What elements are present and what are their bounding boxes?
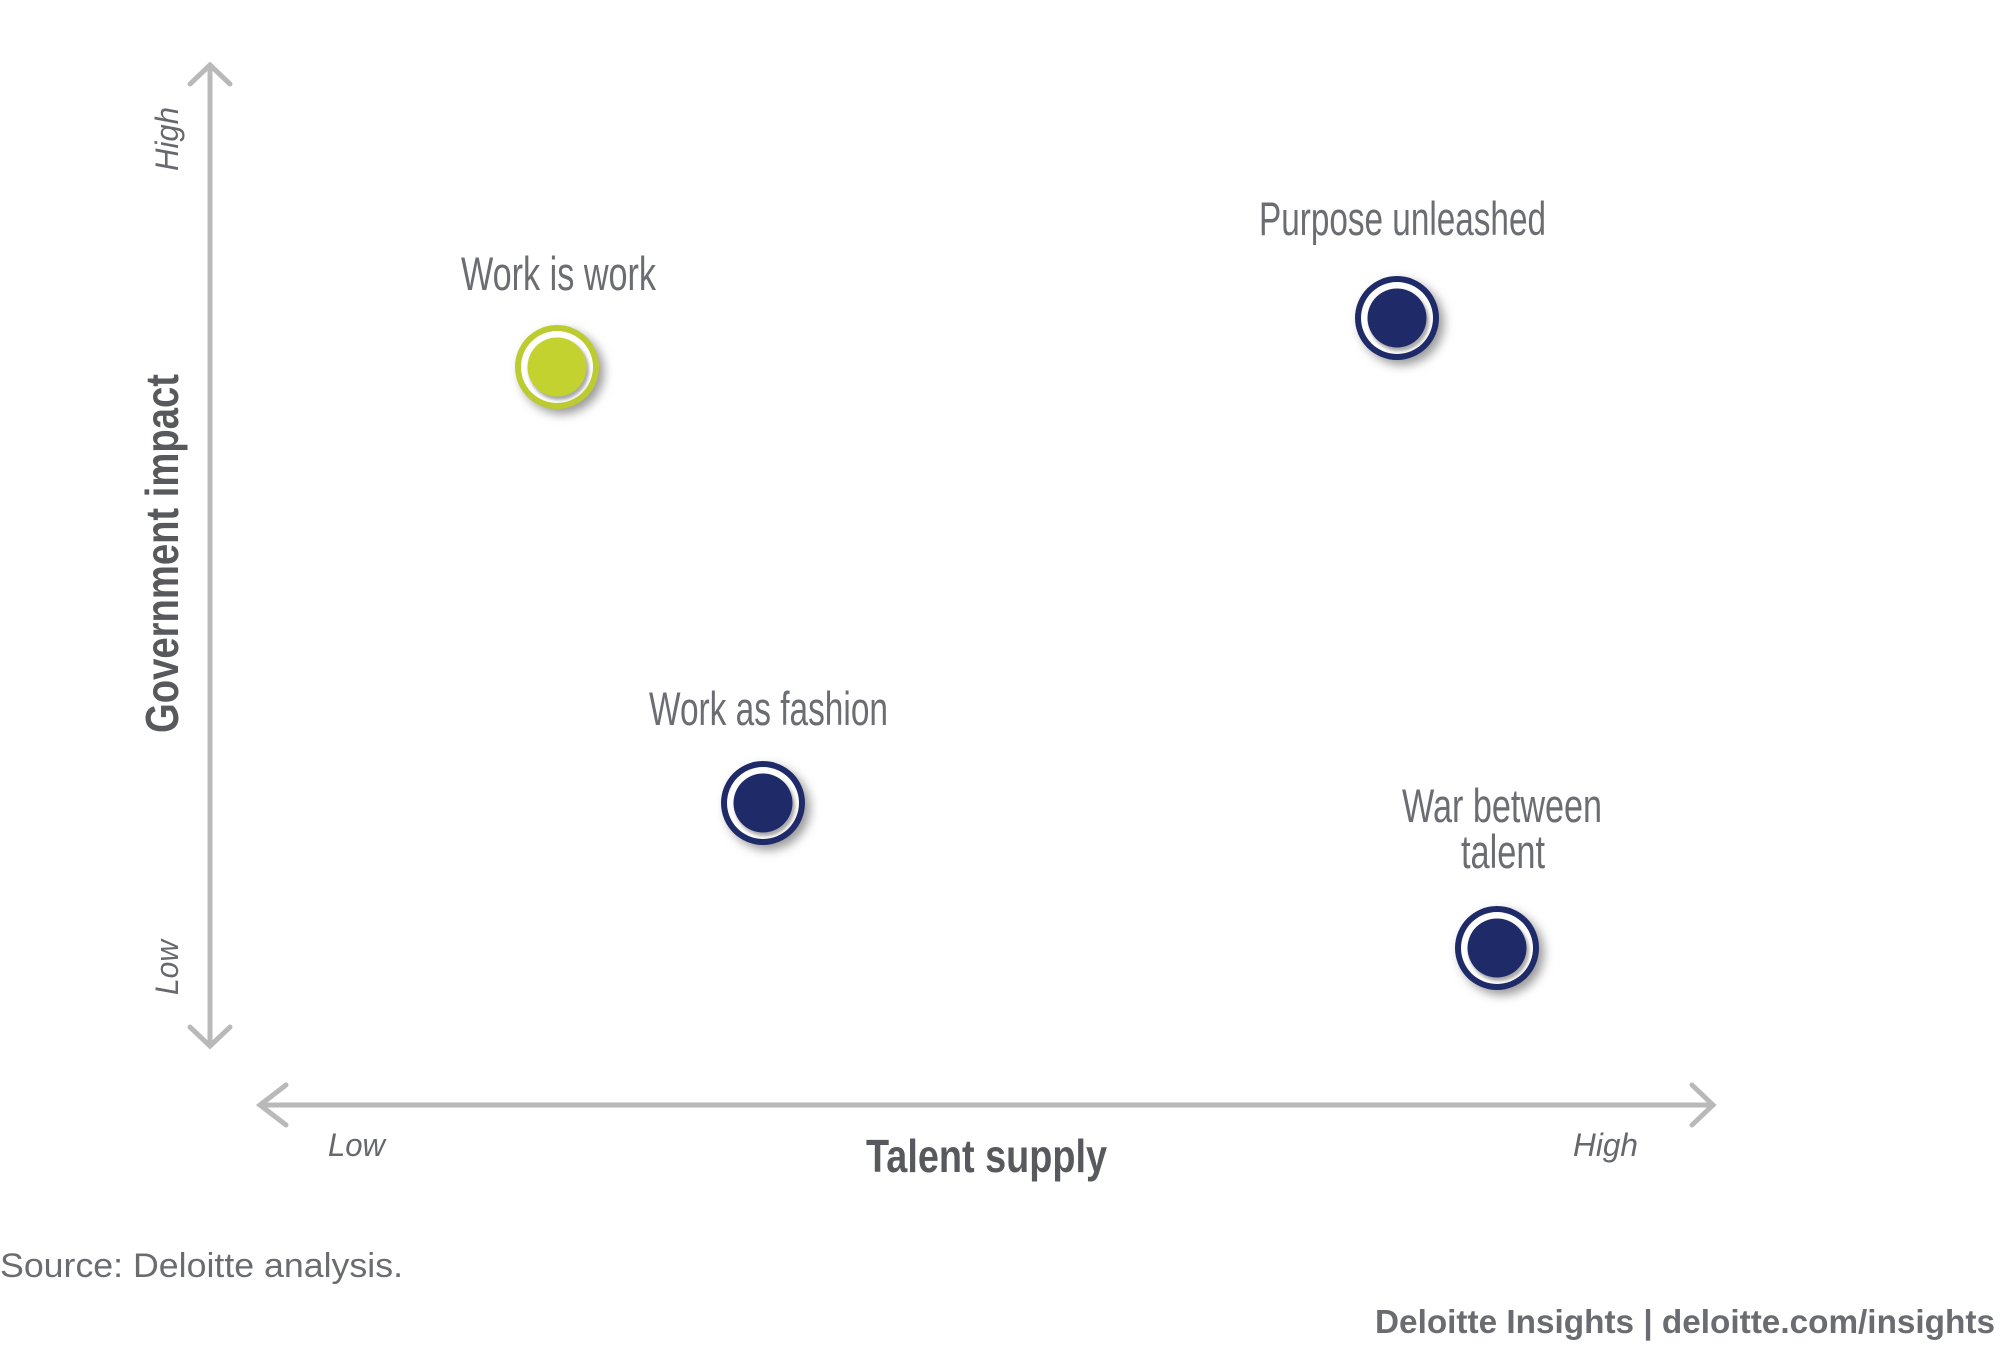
label: war between talent: War between (1402, 779, 1602, 832)
vertical axis title: Government impact (136, 374, 188, 733)
vertical axis high label: High (149, 107, 185, 171)
marker: purpose unleashed (1355, 276, 1444, 365)
label: war between talent (1402, 779, 1602, 878)
label: work as fashion: Work as fashion (649, 682, 888, 735)
marker: work as fashion (721, 761, 810, 850)
label: work is work: Work is work (461, 247, 656, 300)
marker: work is work (515, 325, 604, 414)
horizontal axis title: Talent supply (866, 1130, 1107, 1182)
vertical axis low label: Low (149, 938, 185, 995)
horizontal axis high label: High (1573, 1127, 1638, 1163)
vertical axis arrow (190, 65, 230, 1046)
horizontal axis arrow (260, 1085, 1713, 1125)
marker: war between talent (1455, 906, 1544, 995)
footer credit: Deloitte Insights | deloitte.com/insights (1375, 1303, 1995, 1340)
source note: Source: Deloitte analysis. (0, 1247, 403, 1285)
label: purpose unleashed: Purpose unleashed (1259, 192, 1546, 245)
label: war between talent: talent (1461, 825, 1545, 878)
horizontal axis low label: Low (328, 1127, 387, 1163)
